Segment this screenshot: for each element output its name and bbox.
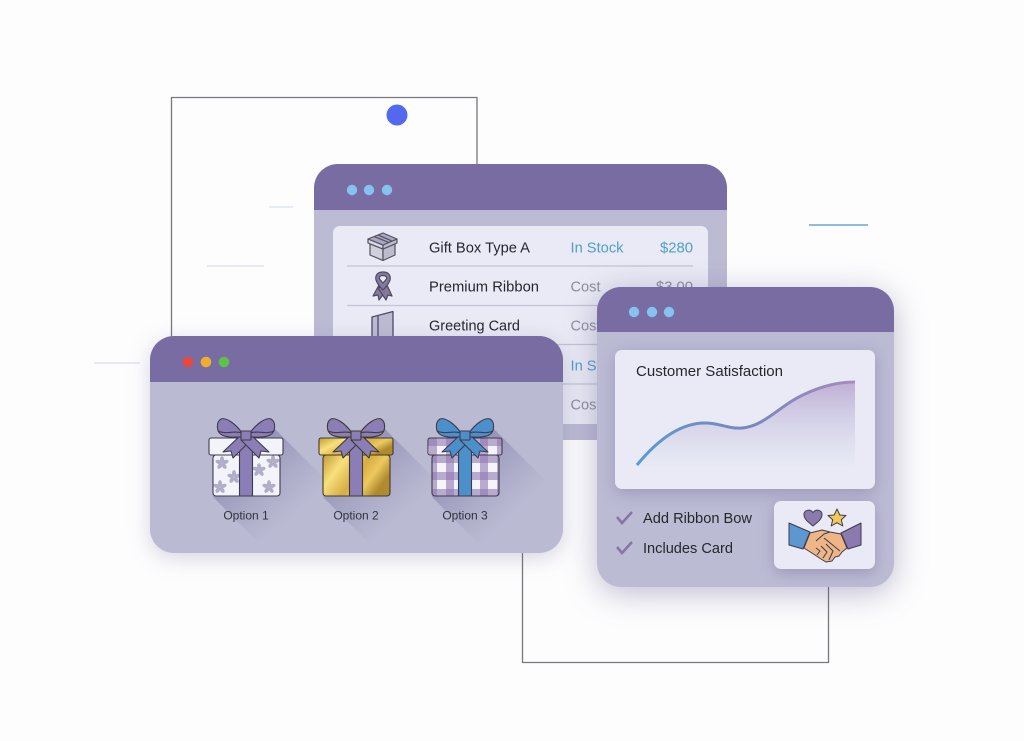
ribbon [458, 440, 472, 496]
row 2: $3.00 [656, 278, 693, 296]
bow [327, 419, 385, 458]
box body [213, 455, 280, 496]
icon: heart [804, 510, 822, 526]
window: customer satisfaction [597, 287, 894, 587]
row 1: $280 [660, 240, 693, 256]
long shadows [213, 429, 534, 530]
window header [150, 336, 563, 382]
row 1 [429, 240, 693, 256]
row 3: Greeting Card [429, 318, 520, 334]
blue dot [386, 104, 408, 126]
row 4: In Stock [570, 358, 624, 374]
outline frame: upper left [172, 98, 477, 340]
window header [597, 287, 894, 332]
handshake card [774, 501, 875, 569]
row separators [347, 266, 693, 384]
infographic canvas [94, 96, 912, 664]
faint background accent lines [94, 207, 868, 363]
table panel [333, 226, 708, 424]
card background [615, 350, 875, 489]
option labels [223, 508, 488, 522]
row 2: Premium Ribbon [429, 278, 539, 296]
gift: option 2 [319, 419, 393, 496]
gift: option 3 [428, 419, 502, 496]
icon: ribbon [373, 272, 392, 300]
chart title: Customer Satisfaction [636, 363, 783, 380]
outline frame: lower right [522, 548, 828, 662]
traffic-light dots [183, 357, 229, 367]
row 3 [429, 318, 601, 334]
card background [774, 501, 875, 569]
icon: greeting card [372, 312, 393, 339]
window body [150, 336, 563, 553]
chart card [615, 350, 875, 489]
row 5: Cost [570, 396, 601, 414]
row 3: Cost [570, 318, 601, 334]
bow [217, 419, 275, 458]
box body [432, 455, 499, 496]
option labels: Option 1 [223, 508, 269, 522]
gift: option 1 [209, 419, 283, 496]
window header [314, 164, 727, 210]
window body [597, 287, 894, 587]
row 1: Gift Box Type A [429, 240, 530, 256]
window: gift options [150, 336, 563, 567]
bow [436, 419, 494, 458]
window dots [347, 185, 392, 195]
icon: star [828, 509, 846, 526]
window body [314, 164, 727, 440]
row 2: Cost [570, 278, 601, 296]
area under curve [637, 382, 855, 470]
icon: gift box [368, 233, 397, 260]
box body [323, 455, 390, 496]
row 2 [429, 278, 693, 296]
icon: handshake [789, 523, 861, 562]
box lid [319, 438, 393, 455]
box lid [428, 438, 502, 455]
row 1: In Stock [570, 240, 624, 256]
checklist item: add ribbon bow: Add Ribbon Bow [643, 510, 752, 527]
ribbon [240, 440, 252, 496]
window dots [629, 307, 674, 317]
flower print [213, 455, 280, 494]
ribbon [350, 440, 362, 496]
line curve [637, 382, 855, 465]
checklist item: includes card: Includes Card [643, 540, 733, 557]
box lid [209, 438, 283, 455]
option labels: Option 3 [442, 508, 488, 522]
option labels: Option 2 [333, 508, 379, 522]
window: inventory table [314, 164, 727, 440]
